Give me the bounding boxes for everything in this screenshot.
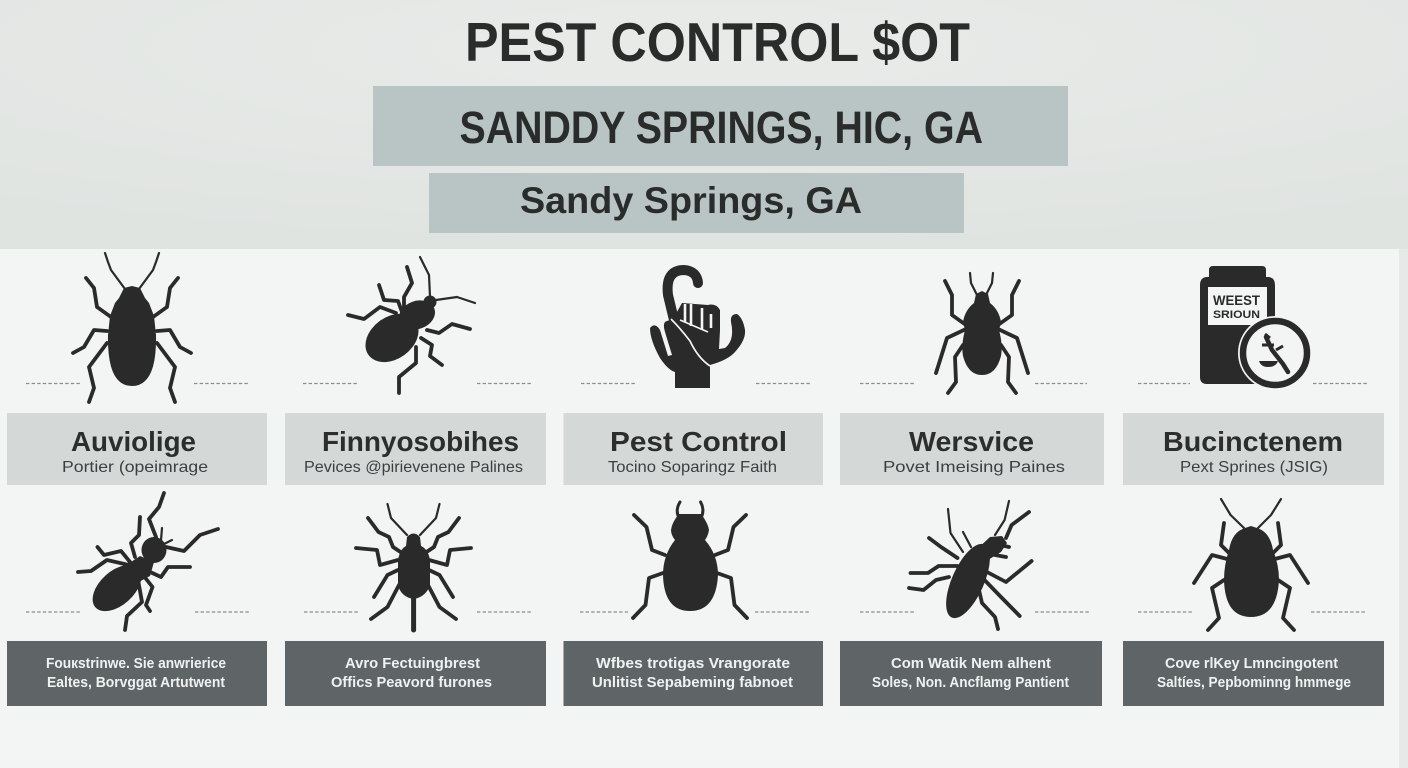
icon: cockroach angled [909,501,1032,629]
card: Auviolige [7,413,267,485]
icon: pesticide jar [1200,266,1312,390]
card: dark note 1: Ealtes, Borvggat Artutwent [47,675,225,691]
card: Pest Control: Pest Control [610,426,787,457]
card: dark note 3: Unlitist Sepabeming fabnoet [592,675,793,691]
icon: beetle top view [73,253,191,402]
divider: cockroach [860,611,1090,613]
divider: slim beetle [860,382,1087,384]
card: Finnyosobihes: Pevices @pirievenene Palines [304,459,523,476]
card: Wersvice: Povet Imeising Paines [883,459,1065,476]
icon: pesticide jar: WEEST [1213,293,1261,308]
card: Pest Control [564,413,823,485]
card: Bucinctenem [1123,413,1384,485]
card: dark note 1 [7,641,267,706]
icon: long-legged bug [356,504,471,630]
divider: round beetle [1138,611,1366,613]
card: dark note 2: Offics Peavord furones [331,675,492,691]
card: dark note 1: Fouкstrinwe. Sie anwrierice [46,656,226,672]
icon: hand with hook [650,270,745,388]
card: dark note 4 [840,641,1102,706]
card: dark note 2: Avro Fectuingbrest [345,656,480,672]
icon: pesticide jar: SRIOUN [1213,309,1260,321]
banner: location subheading [429,173,964,233]
card: dark note 3: Wfbes trotigas Vrangorate [596,656,790,672]
card: dark note 5 [1123,641,1384,706]
banner: location subheading: Sandy Springs, GA [520,180,862,221]
card: dark note 4: Soles, Non. Ancflamg Pantient [872,675,1069,691]
card: Pest Control: Tocino Soparingz Faith [608,459,777,476]
icon: beetle angled [348,257,475,393]
card: Wersvice [840,413,1104,485]
divider: ant [26,611,250,613]
icon: ant [78,493,218,630]
card: Bucinctenem: Pext Sprines (JSIG) [1180,459,1328,476]
divider: long-legged bug [304,611,531,613]
card: Wersvice: Wersvice [909,426,1034,457]
divider: horned beetle [580,611,809,613]
card: dark note 4: Com Watik Nem alhent [891,656,1051,672]
card: Auviolige: Auviolige [71,426,196,457]
banner: city heading: SANDDY SPRINGS, HIC, GA [460,102,983,153]
card: Bucinctenem: Bucinctenem [1163,426,1343,457]
divider: jar [1138,382,1367,384]
card: Finnyosobihes: Finnyosobihes [322,426,519,457]
card: dark note 2 [285,641,546,706]
icon: horned beetle [633,502,747,618]
card: Finnyosobihes [285,413,546,485]
icon: slim beetle [936,273,1028,393]
card: dark note 5: Cove rlKey Lmncingotent [1165,656,1338,672]
card: dark note 3 [564,641,823,706]
card: Auviolige: Portier (opeimrage [62,459,208,476]
banner: city heading [373,86,1068,166]
card: dark note 5: Saltíes, Pepbominng hmmege [1157,675,1351,691]
divider: hand [581,382,810,384]
title: PEST CONTROL $OT [465,11,970,73]
divider: beetle [26,382,248,384]
icon: round beetle [1194,499,1308,630]
divider: angled beetle [303,382,531,384]
